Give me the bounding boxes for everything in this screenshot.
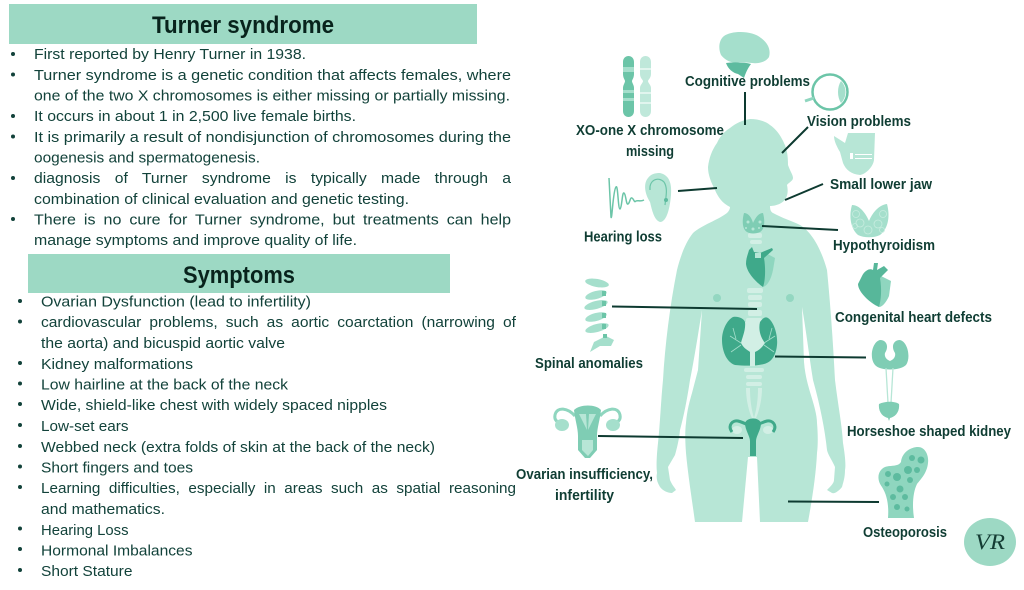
label: XO-one X chromosome missing [576,123,724,160]
text block: overview bullets: First reported by Henry Turner in 1938. [34,46,306,63]
label: Horseshoe shaped kidney: Horseshoe shaped kidney [847,424,1011,440]
icon: spine [583,277,614,352]
label: Hearing loss: Hearing loss [584,230,662,246]
text block: overview bullets: oogenesis and spermatogenesis. [34,150,260,166]
text block: symptom bullets: Short Stature [41,563,132,580]
text block: symptom bullets: Hormonal Imbalances [41,542,192,560]
icon: kidneys and bladder [872,340,908,421]
icon: eye [805,74,848,110]
icon: brain [719,32,770,78]
text block: symptom bullets: Kidney malformations [41,356,193,373]
text block: overview bullets: Turner syndrome is a genetic condition that affects females, where [34,67,511,84]
label: Ovarian insufficiency, infertility: Ovarian insufficiency, [516,467,653,483]
label: Hypothyroidism: Hypothyroidism [833,238,935,254]
heading: Symptoms [28,254,450,293]
text block: overview bullets: diagnosis of Turner syndrome is typically made through a [34,170,512,187]
internal spine [744,233,764,418]
text block: overview bullets: one of the two X chromosomes is either missing or partially missing. [34,88,510,104]
heading: Symptoms: Symptoms [183,262,295,289]
text block: symptom bullets: Low-set ears [41,418,128,435]
icon: hearing wave and ear [609,173,671,222]
text block: symptom bullets: and mathematics. [41,501,165,518]
text block: overview bullets: manage symptoms and improve quality of life. [34,232,357,249]
text block: overview bullets [11,46,512,249]
organ: uterus in body [730,418,775,456]
organ: kidneys in body [722,317,777,366]
label: Cognitive problems: Cognitive problems [685,74,810,90]
icon: heart [858,263,891,307]
text block: symptom bullets: Webbed neck (extra folds of skin at the back of the neck) [41,439,435,456]
text block: symptom bullets: Short fingers and toes [41,460,193,476]
text block: overview bullets: combination of clinical evaluation and genetic testing. [34,191,409,208]
panel: Turner syndrome text [9,4,512,249]
icon: osteoporotic bone [878,447,928,518]
text block: symptom bullets: cardiovascular problems, such as aortic coarctation (narrowing of [41,314,517,331]
nipples [713,294,794,302]
text block: symptom bullets: Ovarian Dysfunction (lead to infertility) [41,294,311,310]
icon: chromosomes [623,56,651,117]
organ: thyroid in body [743,213,764,234]
icon: thyroid [850,204,889,237]
text block: symptom bullets: the aorta) and bicuspid aortic valve [41,335,285,352]
text block: symptom bullets: Learning difficulties, especially in areas such as spatial reasoning [41,480,516,497]
text block: overview bullets: It is primarily a result of nondisjunction of chromosomes during the [34,129,511,146]
icon: uterus and ovaries [555,406,620,458]
logo: VR badge [964,518,1016,566]
label: Small lower jaw: Small lower jaw [830,177,933,193]
text block: symptom bullets: Wide, shield-like chest with widely spaced nipples [41,397,387,414]
label: Osteoporosis: Osteoporosis [863,525,947,541]
label: Spinal anomalies: Spinal anomalies [535,356,643,372]
connector lines [598,92,879,502]
heading: Turner syndrome [9,4,477,44]
text block: symptom bullets [18,294,517,580]
icon: jaw and skull [834,133,875,175]
label: Congenital heart defects: Congenital heart defects [835,310,992,326]
text block: overview bullets: It occurs in about 1 in 2,500 live female births. [34,108,356,125]
heading: Turner syndrome: Turner syndrome [152,12,334,39]
label: Ovarian insufficiency, infertility [516,467,653,504]
logo: VR badge: VR [975,529,1006,554]
text block: overview bullets: There is no cure for Turner syndrome, but treatments can help [34,212,511,228]
label: Vision problems: Vision problems [807,114,911,130]
body silhouette [657,119,845,522]
label: XO-one X chromosome missing: missing [626,144,674,160]
label: XO-one X chromosome missing: XO-one X chromosome [576,123,724,139]
panel: body diagram [657,119,845,522]
text block: symptom bullets: Low hairline at the back of the neck [41,376,289,394]
panel: Symptoms text [18,254,517,580]
label: Ovarian insufficiency, infertility: infertility [555,488,614,504]
text block: symptom bullets: Hearing Loss [41,522,128,539]
organ: heart in body [746,247,775,287]
